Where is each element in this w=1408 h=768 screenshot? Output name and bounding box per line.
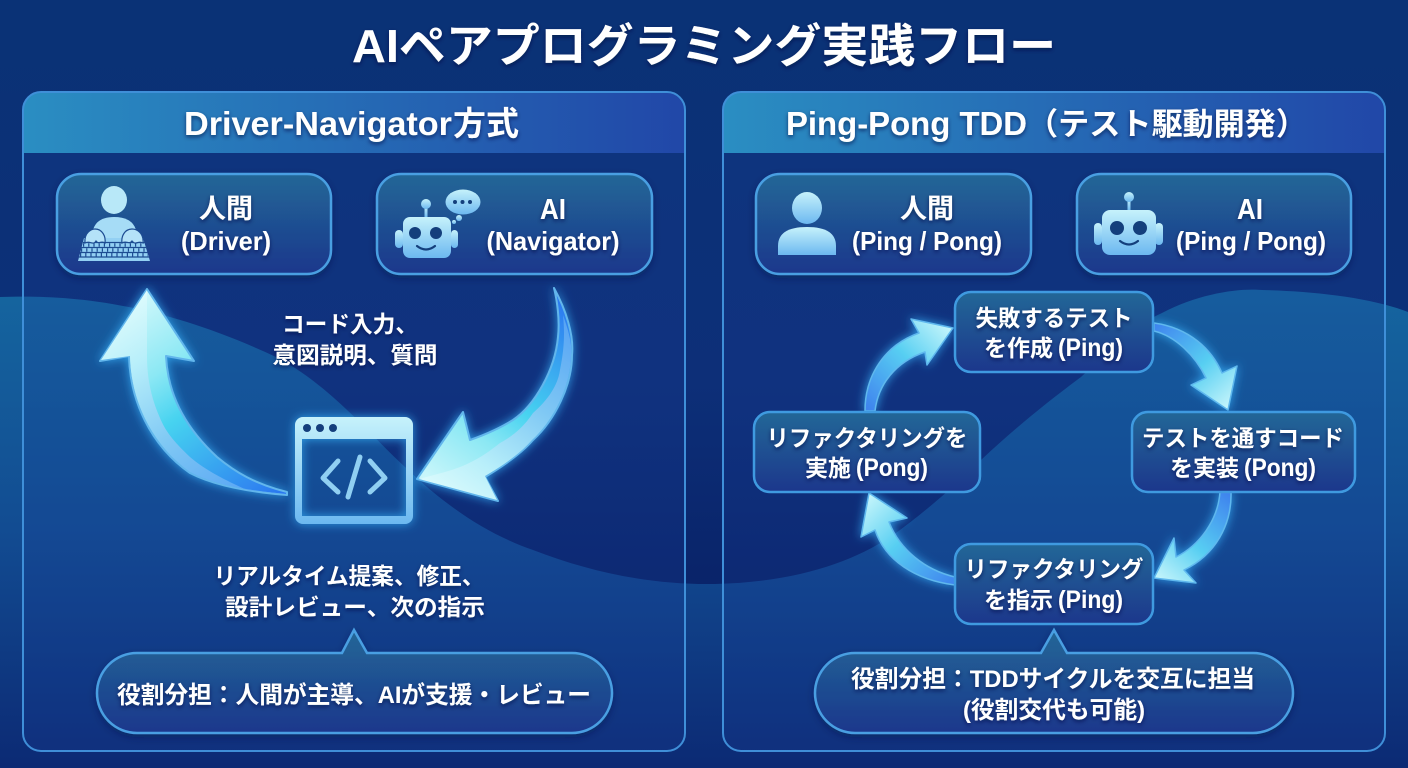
- label: ping pong: (Ping / Pong): [1176, 226, 1326, 256]
- panel border: [23, 92, 685, 751]
- step: implement code: [1132, 412, 1355, 492]
- label: AI: AI: [540, 194, 566, 226]
- label: navigator: (Navigator): [486, 226, 620, 256]
- step: failing test: [955, 292, 1153, 372]
- arrow: step 4 to step 1: [865, 319, 953, 411]
- card: AI navigator: [377, 174, 652, 274]
- arrow: step 3 to step 4: [861, 493, 955, 585]
- arrow: code to human: [100, 289, 287, 495]
- text: AI actions: リアルタイム提案、修正、: [214, 563, 484, 589]
- icon: robot with speech bubble: [395, 190, 480, 258]
- text: AI actions: [214, 563, 485, 620]
- icon: code window: [295, 417, 413, 524]
- callout: role division left: [97, 630, 612, 733]
- step: implement code: (Pong): [1244, 454, 1316, 482]
- icon: person: [778, 192, 836, 255]
- icon: robot: [1094, 192, 1163, 255]
- label: ping pong: (Ping / Pong): [852, 226, 1002, 256]
- label: human: 人間: [199, 194, 253, 224]
- panel heading: Ping-Pong TDD: [786, 105, 1027, 142]
- step: perform refactoring: 実施: [805, 455, 851, 481]
- callout text: 役割分担：TDDサイクルを交互に担当: [851, 666, 1255, 693]
- step: failing test: 失敗するテスト: [976, 305, 1132, 331]
- step: implement code: を実装: [1170, 455, 1239, 481]
- callout text: [851, 666, 1255, 724]
- title: AIペアプログラミング実践フロー: [352, 20, 1056, 72]
- text: human actions: コード入力、: [282, 311, 418, 337]
- panel: Ping-Pong TDD: [723, 92, 1385, 751]
- card: human driver: [57, 174, 331, 274]
- arrow: step 2 to step 3: [1154, 492, 1231, 583]
- panel header: Driver-Navigator: [23, 92, 685, 153]
- panel: Driver-Navigator: [23, 92, 685, 751]
- label: AI: AI: [1237, 194, 1263, 226]
- label: human: 人間: [900, 194, 954, 224]
- panel border: [723, 92, 1385, 751]
- step: perform refactoring: [754, 412, 980, 492]
- text: human actions: 意図説明、質問: [272, 342, 438, 368]
- step: request refactoring: を指示: [984, 587, 1053, 613]
- panel header: Ping-Pong: [723, 92, 1385, 153]
- callout text: 役割分担：人間が主導、AIが支援・レビュー: [117, 681, 591, 709]
- arrow: step 1 to step 2: [1154, 323, 1237, 410]
- step: implement code: テストを通すコード: [1142, 425, 1344, 451]
- label: driver: (Driver): [181, 226, 271, 256]
- step: perform refactoring: リファクタリングを: [766, 425, 968, 451]
- panel heading: 方式: [453, 105, 519, 142]
- card: human ping pong: [756, 174, 1031, 274]
- step: request refactoring: [955, 544, 1153, 624]
- step: failing test: (Ping): [1058, 334, 1123, 362]
- icon: person at keyboard: [78, 186, 150, 261]
- text: human actions: [272, 311, 438, 368]
- step: request refactoring: リファクタリング: [964, 556, 1144, 582]
- text: AI actions: 設計レビュー、次の指示: [225, 594, 485, 620]
- step: request refactoring: (Ping): [1058, 586, 1123, 614]
- step: failing test: を作成: [984, 335, 1053, 361]
- callout: role division right: [815, 630, 1293, 733]
- callout text: (役割交代も可能): [963, 697, 1145, 724]
- arrow: AI to code: [417, 288, 572, 501]
- panel heading: [786, 105, 1307, 142]
- step: perform refactoring: (Pong): [856, 454, 928, 482]
- panel heading: （テスト駆動開発）: [1027, 107, 1307, 142]
- card: AI ping pong: [1077, 174, 1351, 274]
- panel heading: Driver-Navigator: [184, 105, 452, 142]
